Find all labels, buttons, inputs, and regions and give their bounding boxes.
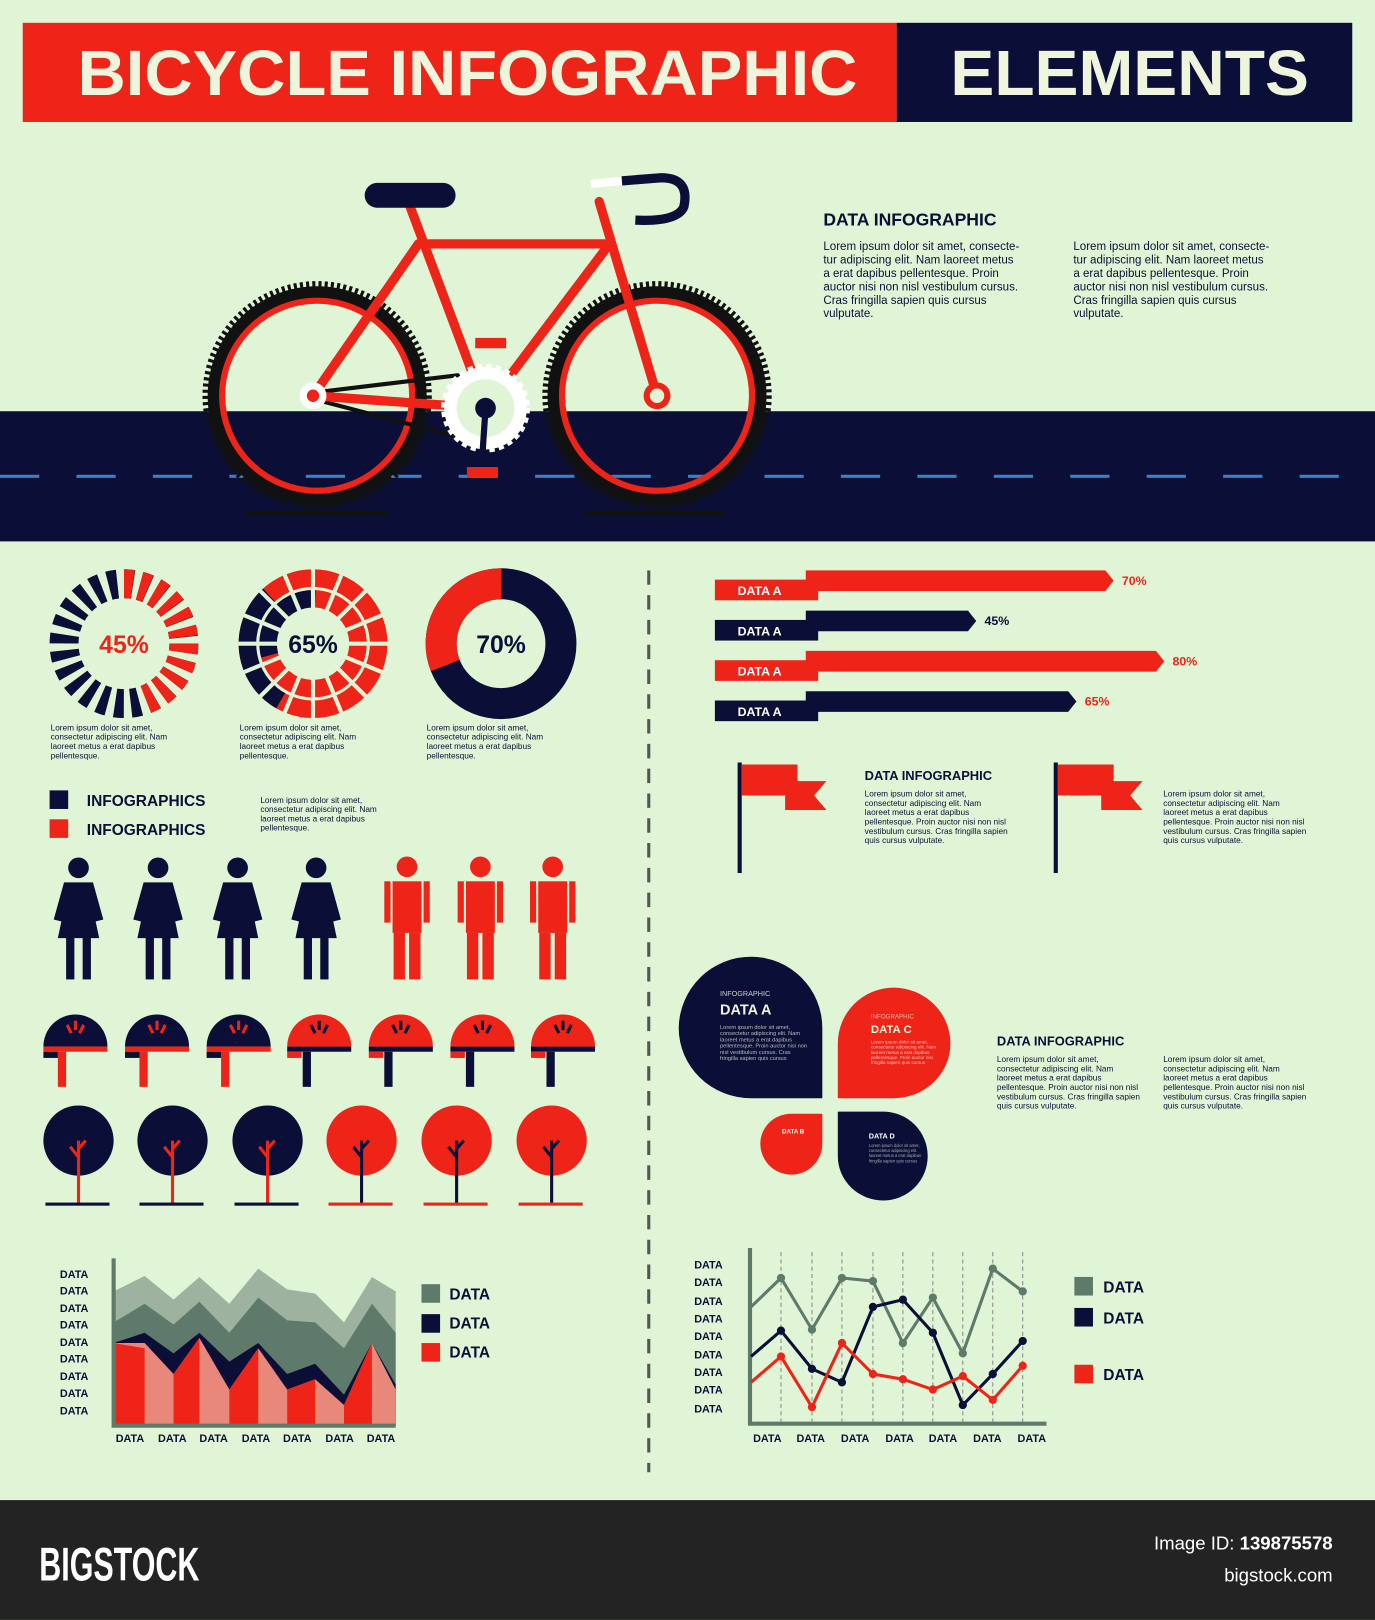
title banner: ELEMENTS	[950, 37, 1309, 109]
text block: petals: vestibulum cursus. Cras fringilla sapien	[997, 1092, 1140, 1101]
area chart: DATA	[242, 1433, 270, 1445]
bar chart: 65%	[1085, 695, 1109, 709]
line chart: DATA	[1103, 1367, 1144, 1384]
petal diagram: DATA C	[871, 1024, 912, 1036]
footer: bigstock.com	[1224, 1565, 1333, 1586]
area chart: DATA	[158, 1433, 187, 1445]
line chart: DATA	[1018, 1433, 1046, 1445]
text block: petals: vestibulum cursus. Cras fringilla sapien	[1163, 1092, 1307, 1101]
bar chart: 70%	[1122, 574, 1147, 588]
legend: infographics: INFOGRAPHICS	[87, 822, 205, 839]
area chart: DATA	[60, 1303, 89, 1315]
line chart: DATA	[973, 1433, 1002, 1445]
petal diagram: consectetur adipiscing elit. Nam	[871, 1045, 936, 1050]
area chart: DATA	[60, 1337, 89, 1349]
top text block: DATA INFOGRAPHIC	[823, 209, 997, 229]
legend: infographics: laoreet metus a erat dapibus	[260, 814, 365, 823]
area chart: DATA	[283, 1433, 312, 1445]
flags: vestibulum cursus. Cras fringilla sapien	[865, 827, 1008, 836]
flags: DATA INFOGRAPHIC	[865, 768, 992, 783]
petal diagram: laoreet metus a erat dapibus	[720, 1037, 792, 1043]
top text block: auctor nisi non nisl vestibulum cursus.	[823, 281, 1018, 293]
icons: helmets	[43, 1015, 595, 1087]
area chart: DATA	[60, 1405, 89, 1417]
petal diagram: laoreet metus a erat dapibus	[871, 1050, 930, 1055]
line chart: DATA	[753, 1433, 782, 1445]
petal diagram: pellentesque. Proin auctor nisi	[871, 1055, 933, 1060]
flags: quis cursus vulputate.	[1163, 836, 1243, 845]
chart: radial 45%: 45%	[99, 632, 149, 659]
donut captions: pellentesque.	[427, 751, 476, 760]
petal diagram: laoreet metus a erat dapibus	[869, 1153, 921, 1158]
bicycle illustration	[206, 178, 769, 514]
top text block: tur adipiscing elit. Nam laoreet metus	[823, 255, 1014, 267]
donut captions: laoreet metus a erat dapibus	[427, 742, 531, 751]
line chart: DATA	[1103, 1310, 1144, 1327]
area chart: DATA	[60, 1371, 89, 1383]
text block: petals: pellentesque. Proin auctor nisi non nisl	[997, 1083, 1138, 1092]
line chart: DATA	[694, 1313, 723, 1325]
petal diagram: nisl vestibulum cursus. Cras	[720, 1050, 791, 1056]
petal diagram: Lorem ipsum dolor sit amet,	[720, 1025, 790, 1031]
top text block: Cras fringilla sapien quis cursus	[823, 295, 987, 307]
area chart: DATA	[367, 1433, 395, 1445]
area chart	[60, 1258, 490, 1445]
petal diagram: Lorem ipsum dolor sit amet,	[871, 1039, 928, 1044]
top text block: Lorem ipsum dolor sit amet, consecte-	[823, 241, 1019, 253]
top text block	[823, 209, 1269, 320]
flags: Lorem ipsum dolor sit amet,	[1163, 790, 1265, 799]
bar chart: 80%	[1173, 654, 1197, 668]
line chart	[694, 1248, 1144, 1445]
bar chart: DATA A	[738, 705, 782, 719]
footer: Image ID: 139875578	[1154, 1533, 1333, 1554]
footer: BIGSTOCK	[39, 1539, 199, 1592]
flags: pellentesque. Proin auctor nisi non nisl	[865, 817, 1006, 826]
chart: radial 45%	[64, 584, 184, 704]
bar chart: DATA A	[738, 624, 782, 638]
petal diagram: INFOGRAPHIC	[871, 1014, 914, 1021]
bar chart	[715, 570, 1197, 721]
line chart: DATA	[694, 1260, 723, 1272]
donut captions: Lorem ipsum dolor sit amet,	[51, 723, 152, 732]
text block: petals: Lorem ipsum dolor sit amet,	[1163, 1055, 1265, 1064]
area chart: DATA	[449, 1287, 490, 1304]
area chart: DATA	[449, 1345, 490, 1362]
line chart: DATA	[694, 1277, 723, 1289]
donut captions: consectetur adipiscing elit. Nam	[51, 733, 167, 742]
petal diagram: INFOGRAPHIC	[720, 989, 770, 998]
flags: quis cursus vulputate.	[865, 836, 944, 845]
donut captions: Lorem ipsum dolor sit amet,	[240, 723, 341, 732]
donut captions: pellentesque.	[51, 751, 100, 760]
text block: petals: quis cursus vulputate.	[997, 1102, 1077, 1111]
petal diagram: DATA B	[782, 1128, 805, 1135]
donut captions: consectetur adipiscing elit. Nam	[427, 733, 543, 742]
divider	[647, 570, 650, 1472]
petal diagram: DATA A	[720, 1003, 772, 1019]
area chart: DATA	[449, 1316, 490, 1333]
line chart: DATA	[694, 1385, 723, 1397]
area chart: DATA	[60, 1269, 89, 1281]
chart: ring 65%: 65%	[288, 632, 338, 659]
flags: laoreet metus a erat dapibus	[1163, 808, 1268, 817]
area chart: DATA	[60, 1320, 89, 1332]
footer	[0, 1500, 1375, 1620]
line chart: DATA	[796, 1433, 825, 1445]
legend: infographics: Lorem ipsum dolor sit amet,	[260, 796, 362, 805]
top text block: a erat dapibus pellentesque. Proin	[1073, 268, 1249, 280]
petal diagram: fringilla sapien quis cursus	[869, 1158, 917, 1163]
bar chart: DATA A	[738, 584, 782, 598]
area chart: DATA	[199, 1433, 228, 1445]
petal diagram: consectetur adipiscing elit.	[869, 1148, 917, 1153]
line chart: DATA	[694, 1296, 723, 1308]
legend: infographics: pellentesque.	[260, 824, 309, 833]
line chart: DATA	[694, 1403, 723, 1415]
line chart: DATA	[885, 1433, 914, 1445]
flags: consectetur adipiscing elit. Nam	[865, 799, 981, 808]
chart: donut 70%	[441, 584, 561, 704]
flags: pellentesque. Proin auctor nisi non nisl	[1163, 817, 1305, 826]
donut captions: laoreet metus a erat dapibus	[51, 742, 155, 751]
flags: laoreet metus a erat dapibus	[865, 808, 969, 817]
title banner: BICYCLE INFOGRAPHIC	[77, 37, 857, 109]
line chart: DATA	[694, 1350, 723, 1362]
title banner	[23, 23, 1352, 122]
top text block: a erat dapibus pellentesque. Proin	[823, 268, 999, 280]
text block: petals: laoreet metus a erat dapibus	[1163, 1074, 1268, 1083]
petal diagram	[679, 957, 950, 1200]
donut captions: pellentesque.	[240, 751, 289, 760]
petal diagram: fringilla sapien quis cursus	[871, 1060, 926, 1065]
bar chart: 45%	[985, 614, 1009, 628]
text block: petals: laoreet metus a erat dapibus	[997, 1074, 1101, 1083]
area chart: DATA	[60, 1286, 89, 1298]
text block: petals: consectetur adipiscing elit. Nam	[997, 1064, 1113, 1073]
legend: infographics: consectetur adipiscing elit. Nam	[260, 805, 377, 814]
petal diagram: pellentesque. Proin auctor nisi non	[720, 1044, 807, 1050]
donut captions	[51, 723, 543, 760]
icons: men	[384, 856, 575, 979]
donut captions: Lorem ipsum dolor sit amet,	[427, 723, 528, 732]
top text block: vulputate.	[1073, 308, 1123, 320]
road	[0, 411, 1375, 541]
legend: infographics: INFOGRAPHICS	[87, 793, 205, 810]
text block: petals	[997, 1034, 1307, 1111]
text block: petals: quis cursus vulputate.	[1163, 1102, 1243, 1111]
text block: petals: Lorem ipsum dolor sit amet,	[997, 1055, 1099, 1064]
petal diagram: DATA D	[869, 1132, 895, 1141]
flags	[738, 762, 1307, 873]
top text block: Cras fringilla sapien quis cursus	[1073, 295, 1237, 307]
flags: consectetur adipiscing elit. Nam	[1163, 799, 1280, 808]
petal diagram: fringilla sapien quis cursus	[720, 1056, 787, 1062]
area chart: DATA	[116, 1433, 144, 1445]
legend: infographics	[50, 790, 377, 839]
text block: petals: pellentesque. Proin auctor nisi non nisl	[1163, 1083, 1305, 1092]
donut captions: laoreet metus a erat dapibus	[240, 742, 344, 751]
petal diagram: consectetur adipiscing elit. Nam	[720, 1031, 800, 1037]
chart: ring 65%	[224, 555, 402, 733]
top text block: vulputate.	[823, 308, 873, 320]
line chart: DATA	[841, 1433, 870, 1445]
area chart: DATA	[60, 1354, 89, 1366]
text block: petals: consectetur adipiscing elit. Nam	[1163, 1064, 1280, 1073]
donut captions: consectetur adipiscing elit. Nam	[240, 733, 356, 742]
top text block: Lorem ipsum dolor sit amet, consecte-	[1073, 241, 1269, 253]
top text block: tur adipiscing elit. Nam laoreet metus	[1073, 255, 1264, 267]
bar chart: DATA A	[738, 665, 782, 679]
line chart: DATA	[929, 1433, 957, 1445]
area chart: DATA	[325, 1433, 354, 1445]
line chart: DATA	[694, 1331, 723, 1343]
petal diagram: Lorem ipsum dolor sit amet,	[869, 1143, 920, 1148]
top text block: auctor nisi non nisl vestibulum cursus.	[1073, 281, 1268, 293]
text block: petals: DATA INFOGRAPHIC	[997, 1034, 1124, 1049]
icons: women	[54, 858, 341, 979]
icons: trees	[43, 1105, 587, 1206]
line chart: DATA	[694, 1367, 723, 1379]
flags: vestibulum cursus. Cras fringilla sapien	[1163, 827, 1307, 836]
area chart: DATA	[60, 1388, 89, 1400]
flags: Lorem ipsum dolor sit amet,	[865, 790, 966, 799]
chart: donut 70%: 70%	[476, 632, 526, 659]
line chart: DATA	[1103, 1279, 1144, 1296]
